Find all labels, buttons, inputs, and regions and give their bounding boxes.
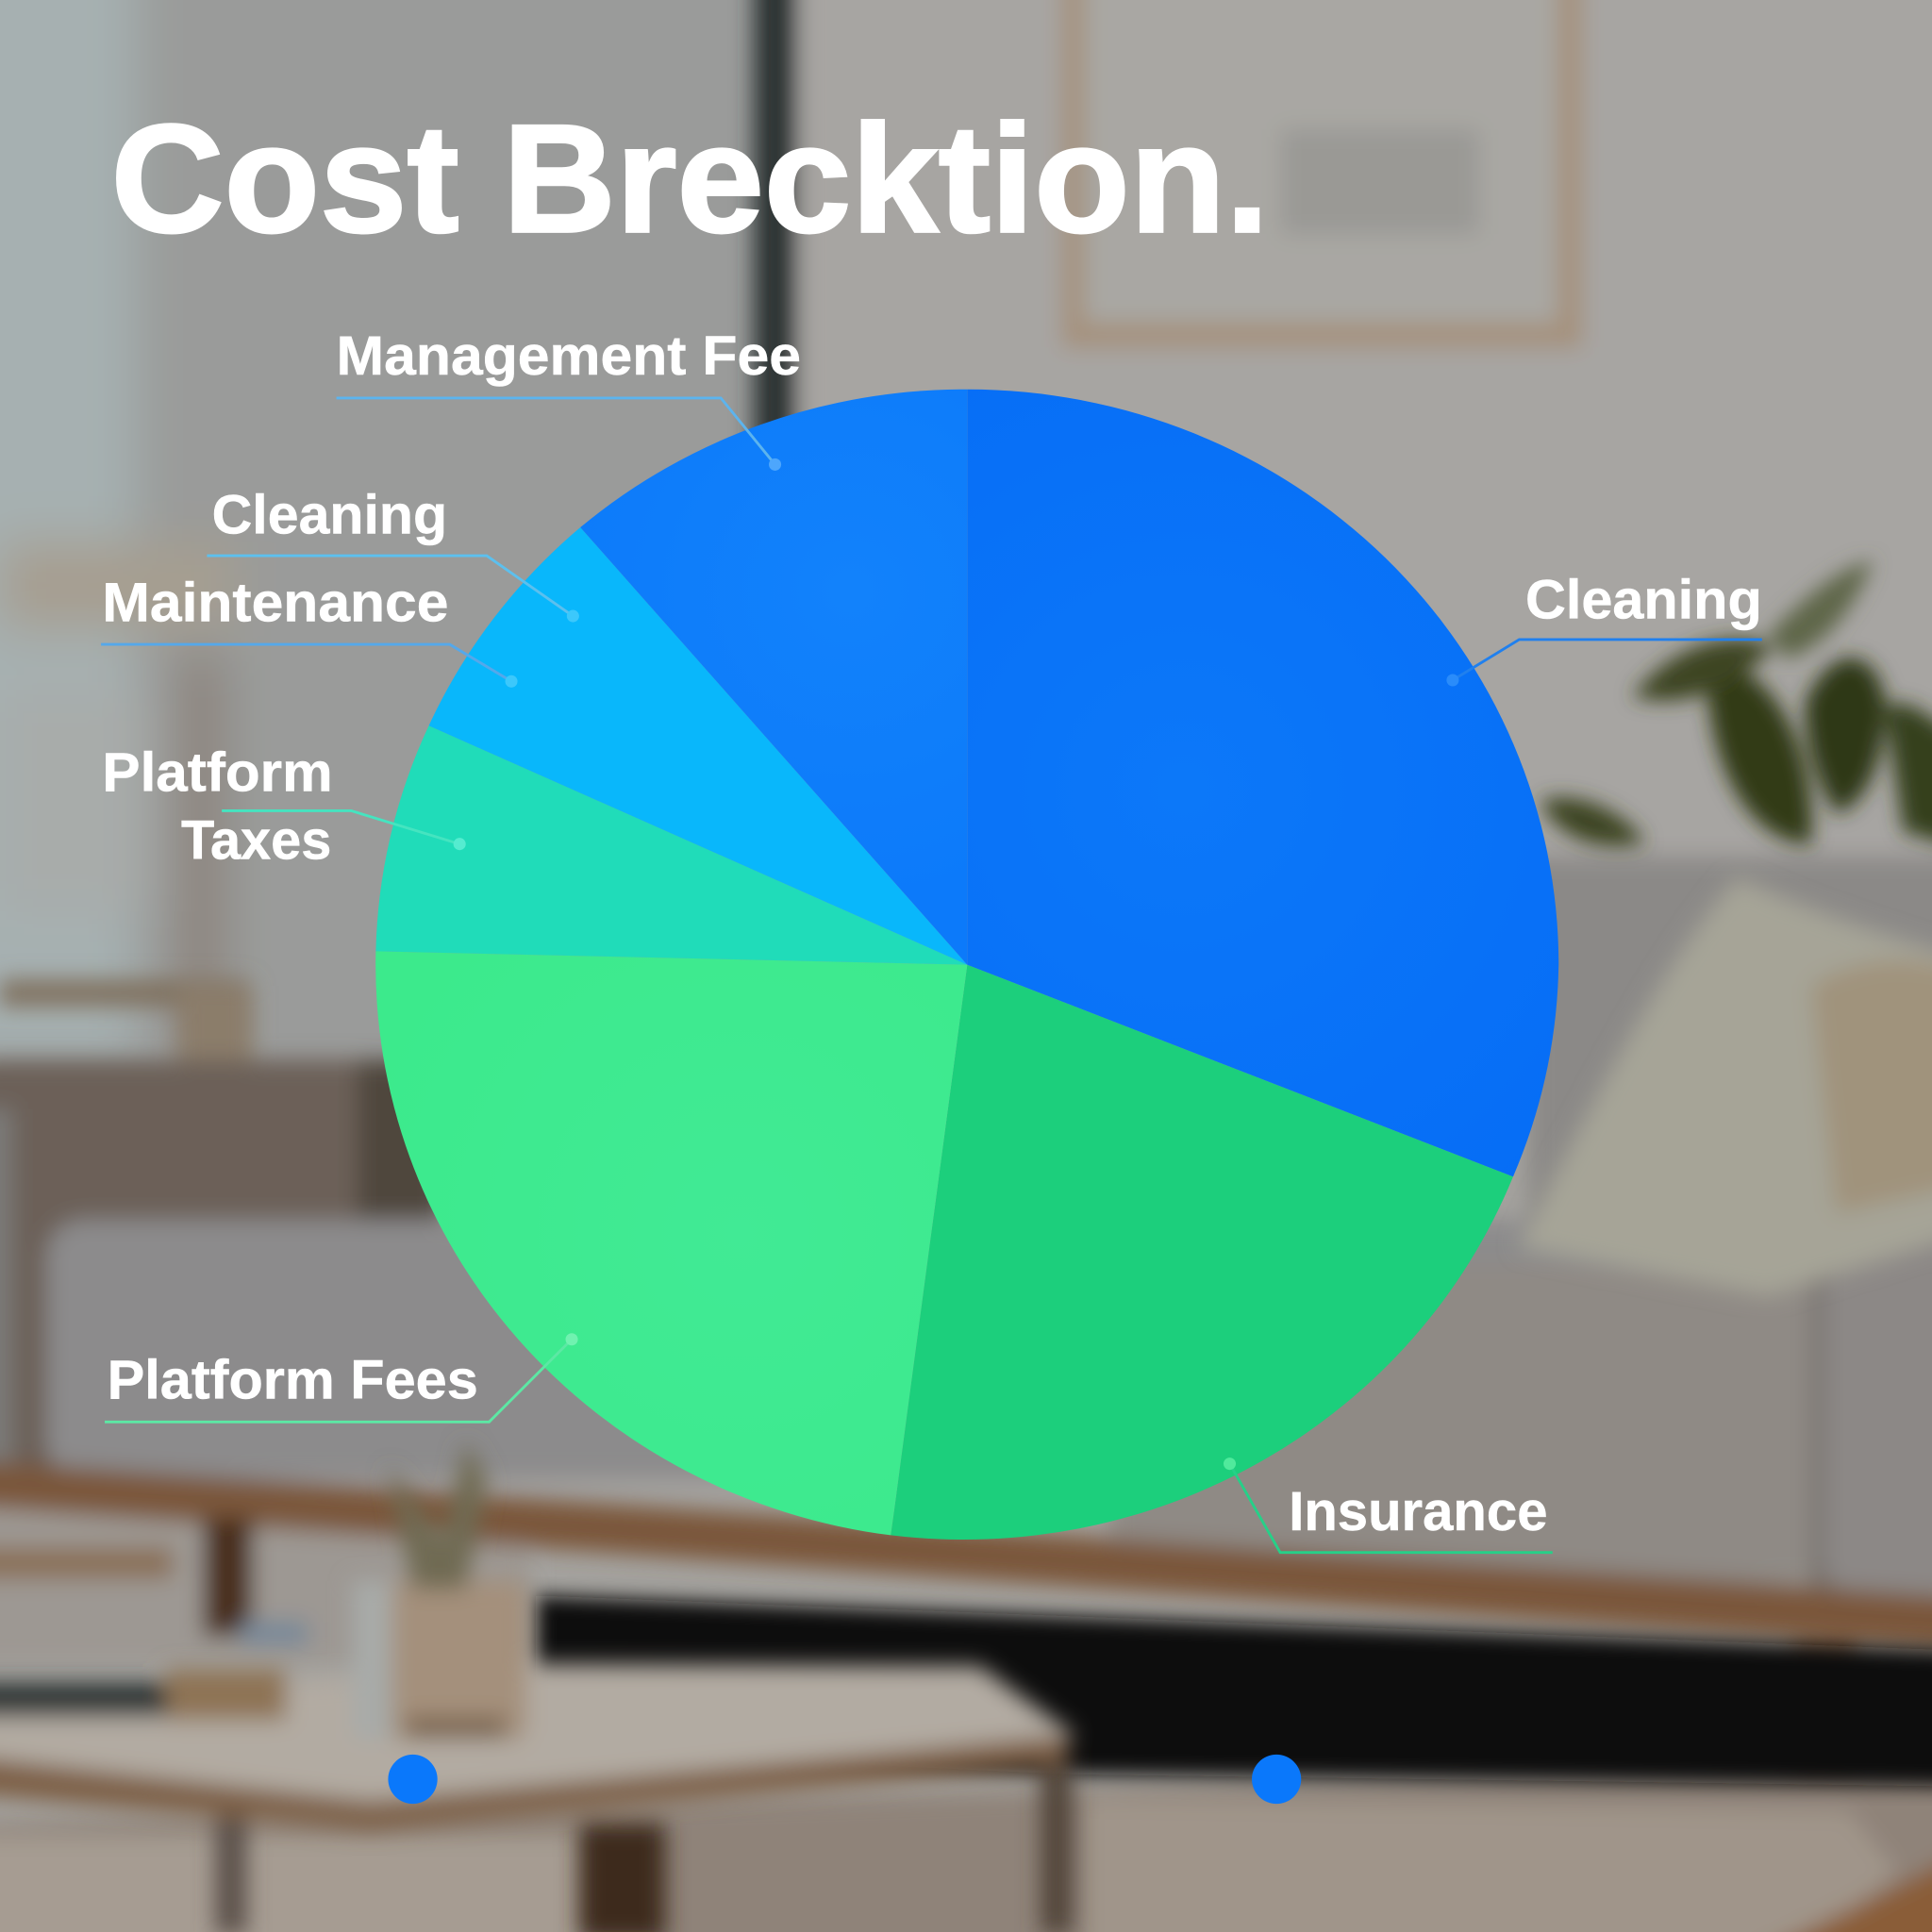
callout: platform taxes — [102, 742, 466, 871]
callout: maintenance: Maintenance — [102, 572, 448, 633]
slice: insurance, dark green — [891, 965, 1513, 1540]
callout: cleaning left: Cleaning — [212, 485, 447, 546]
dark space beneath the sofa — [536, 1595, 1932, 1787]
slice: platform taxes, teal — [375, 725, 967, 965]
callout: platform taxes: Taxes — [181, 809, 331, 871]
callout: cleaning right — [1446, 570, 1762, 687]
callout: cleaning left — [207, 485, 579, 623]
callout: platform fees: Platform Fees — [108, 1349, 478, 1410]
callout: platform taxes: Platform — [102, 742, 333, 804]
callout: maintenance — [101, 572, 518, 688]
title: Cost Brecktion. — [111, 92, 1269, 265]
slice: maintenance and cleaning, cyan — [429, 527, 967, 965]
blue marker dot right — [1252, 1755, 1301, 1804]
blue marker dot left — [388, 1755, 438, 1804]
slice: cleaning, blue — [967, 390, 1558, 1176]
slice: management fee, mid blue — [580, 390, 967, 965]
callout: management fee — [337, 325, 801, 471]
slice: platform fees, light green — [375, 951, 967, 1535]
callout: insurance — [1224, 1457, 1553, 1553]
callout: cleaning right: Cleaning — [1525, 570, 1762, 631]
pie chart — [375, 390, 1558, 1540]
callout: management fee: Management Fee — [337, 325, 801, 387]
callout: platform fees — [105, 1333, 578, 1422]
callout: insurance: Insurance — [1289, 1481, 1547, 1542]
